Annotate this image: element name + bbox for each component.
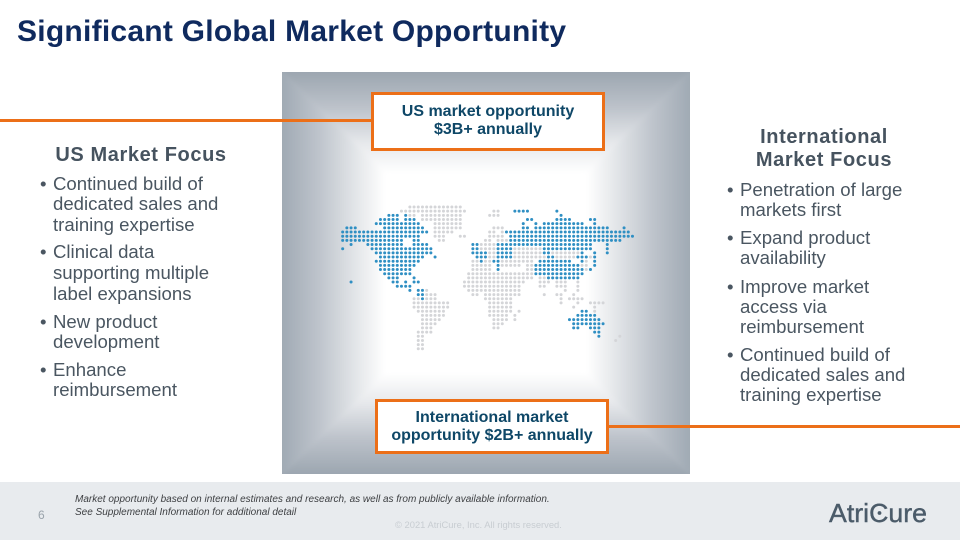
list: international market focus bullets: Improve market (740, 276, 869, 297)
callout: international market opportunity: International market (416, 409, 568, 426)
list: US market focus bullets: New product (53, 311, 157, 332)
panel: map backdrop (282, 72, 690, 474)
callout: US market opportunity: US market opportunity (402, 103, 574, 120)
copyright: © 2021 AtriCure, Inc. All rights reserved. (395, 519, 562, 530)
footnote: Market opportunity based on internal estimates and research, as well as from publicly available information. (75, 494, 550, 505)
list: US market focus bullets: label expansions (53, 283, 192, 304)
list: international market focus bullets: dedicated sales and (740, 364, 905, 385)
list: US market focus bullets: • (40, 173, 47, 194)
list: international market focus bullets: reimbursement (740, 316, 864, 337)
list: US market focus bullets: supporting multiple (53, 262, 209, 283)
page number: 6 (38, 508, 45, 522)
list: international market focus bullets: Continued build of (740, 344, 890, 365)
list: international market focus bullets: • (727, 276, 734, 297)
list: international market focus bullets: markets first (740, 199, 841, 220)
list: international market focus bullets (727, 179, 905, 405)
title: Significant Global Market Opportunity (17, 15, 566, 48)
heading: International Market Focus (756, 126, 892, 171)
list: US market focus bullets: reimbursement (53, 379, 177, 400)
logo: AtriCure: AtriCure (829, 498, 927, 528)
footnote: See Supplemental Information for additional detail (75, 506, 296, 518)
callout: international market opportunity (375, 399, 609, 454)
callout: US market opportunity (371, 92, 605, 151)
list: international market focus bullets: • (727, 344, 734, 365)
list: US market focus bullets: dedicated sales and (53, 193, 218, 214)
list: international market focus bullets: Penetration of large (740, 179, 902, 200)
callout: international market opportunity: opportunity $2B+ annually (391, 427, 593, 444)
heading: US Market Focus: US Market Focus (55, 144, 227, 166)
list: US market focus bullets: development (53, 331, 159, 352)
blue dots: focus markets (343, 211, 633, 336)
list: US market focus bullets (40, 173, 218, 400)
heading: International Market Focus: Market Focus (756, 149, 892, 171)
list: international market focus bullets: access via (740, 296, 827, 317)
list: US market focus bullets: Enhance (53, 359, 126, 380)
list: international market focus bullets: training expertise (740, 384, 882, 405)
list: US market focus bullets: • (40, 359, 47, 380)
list: US market focus bullets: • (40, 311, 47, 332)
footer band (0, 482, 960, 540)
list: international market focus bullets: Expand product (740, 227, 870, 248)
connector line: international callout (607, 425, 960, 428)
connector line: US callout (0, 119, 373, 122)
list: international market focus bullets: availability (740, 247, 826, 268)
list: international market focus bullets: • (727, 179, 734, 200)
heading: International Market Focus: International (760, 126, 888, 148)
footnote (75, 494, 550, 518)
dotted world map (341, 206, 634, 350)
grey dots: land outside focus markets (401, 207, 620, 349)
callout: US market opportunity: $3B+ annually (434, 121, 542, 138)
list: US market focus bullets: Continued build of (53, 173, 203, 194)
list: international market focus bullets: • (727, 227, 734, 248)
list: US market focus bullets: Clinical data (53, 241, 154, 262)
list: US market focus bullets: • (40, 241, 47, 262)
list: US market focus bullets: training expertise (53, 214, 195, 235)
